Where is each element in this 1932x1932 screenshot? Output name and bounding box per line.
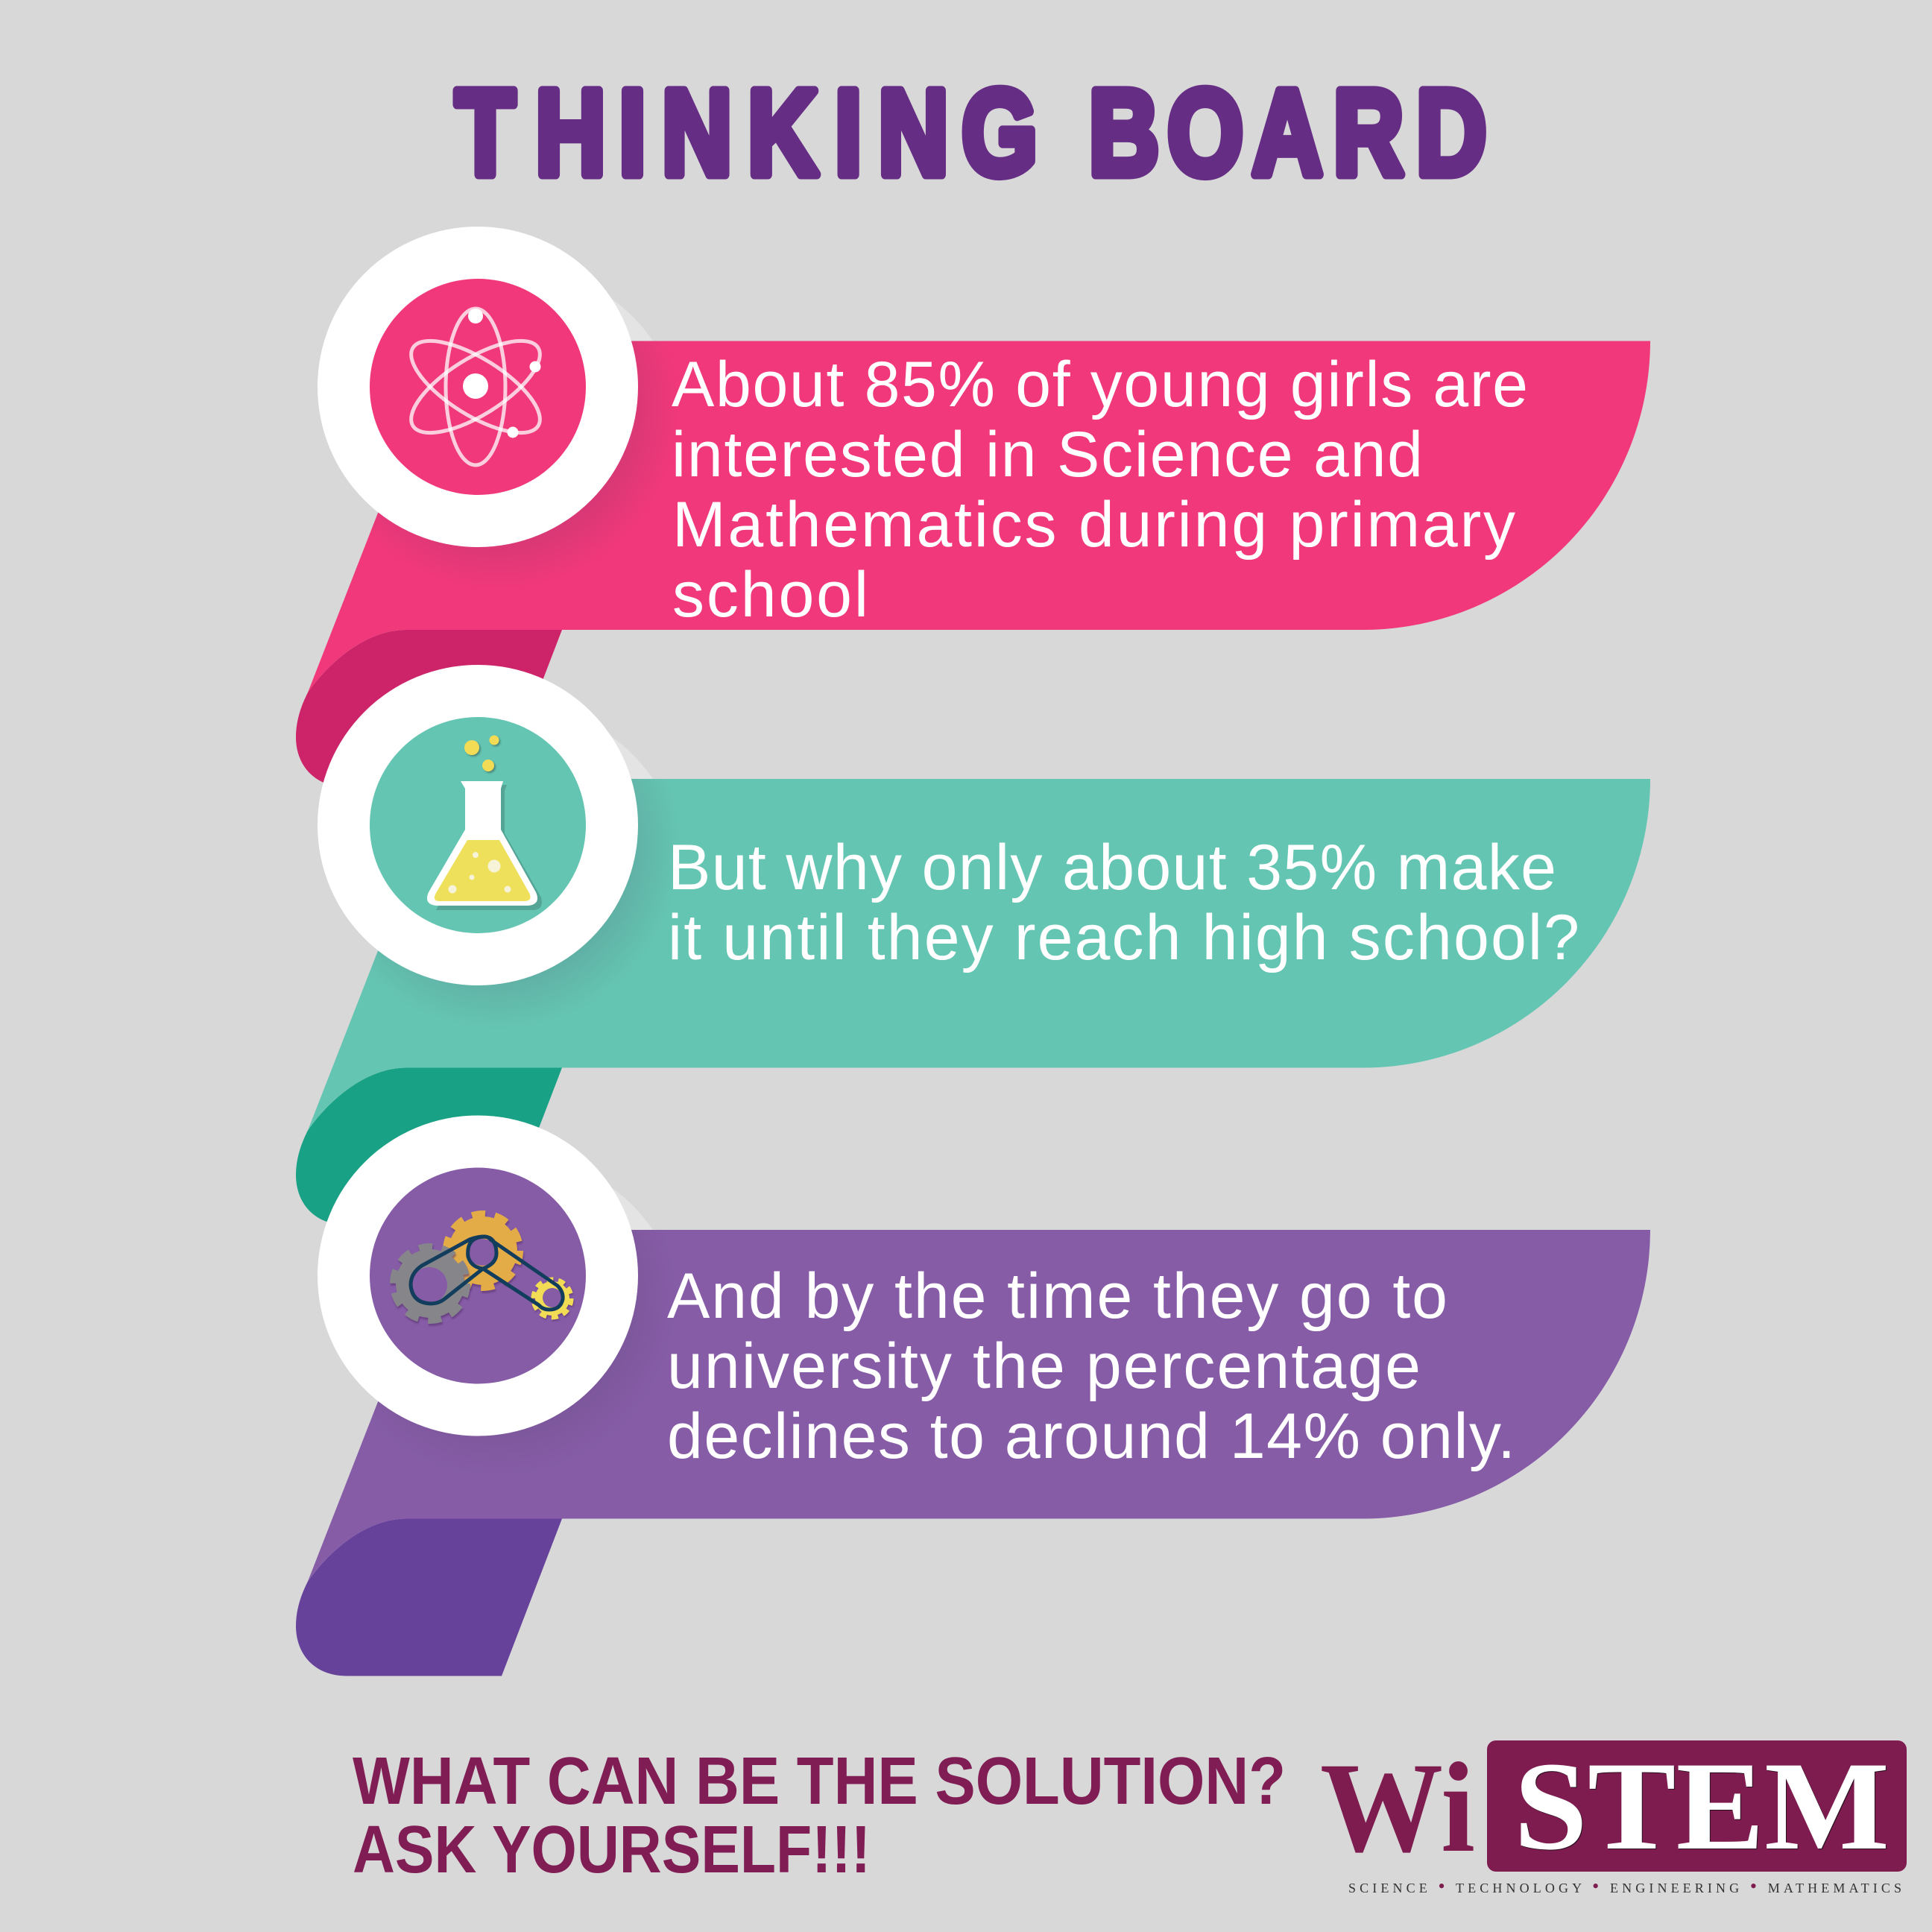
logo box [1487, 1740, 1907, 1872]
light shadow wedge [607, 733, 653, 779]
text block: teal ribbon: But why only about 35% make [668, 832, 1556, 903]
footer question [353, 1744, 1286, 1887]
ribbon fold [296, 1067, 562, 1225]
flask [427, 781, 537, 906]
icon: gears badge [318, 1115, 638, 1436]
drive belts [411, 1237, 563, 1310]
logo: WiSTEM [1320, 1736, 1907, 1897]
gear: yellow [534, 1280, 571, 1317]
ribbon face [308, 341, 1650, 692]
footer question: ASK YOURSELF!!! [353, 1813, 871, 1887]
icon: atom badge [318, 227, 638, 547]
panel: purple ribbon [296, 1115, 1650, 1676]
gear: orange [446, 1214, 520, 1287]
text block: pink ribbon: school [672, 559, 868, 631]
text block: purple ribbon: university the percentage [667, 1330, 1421, 1402]
circle shadow [377, 779, 660, 1009]
circle shadow [440, 1248, 644, 1445]
panel: teal ribbon [296, 663, 1650, 1225]
light shadow wedge [607, 1185, 653, 1230]
text block: purple ribbon: And by the time they go to [667, 1260, 1448, 1332]
ribbon face [308, 779, 1650, 1130]
liquid bubbles [449, 852, 511, 893]
text block: teal ribbon: it until they reach high school? [668, 902, 1579, 973]
footer question: WHAT CAN BE THE SOLUTION? [353, 1744, 1286, 1819]
icon: flask badge [318, 665, 638, 985]
circle shadow [376, 341, 663, 574]
ribbon face [308, 1230, 1650, 1582]
rising bubbles [464, 735, 499, 771]
atom nucleus and electrons [463, 309, 541, 438]
flask shadow [436, 785, 542, 910]
logo tagline: SCIENCE • TECHNOLOGY • ENGINEERING • MATHEMATICS [1348, 1875, 1901, 1897]
panel: pink ribbon [296, 226, 1650, 787]
text block: pink ribbon: About 85% of young girls are [672, 349, 1528, 420]
ribbon fold [296, 630, 562, 787]
text block: purple ribbon [667, 1260, 1515, 1472]
text block: pink ribbon: interested in Science and [672, 419, 1423, 490]
logo word: Wi: Wi [1320, 1737, 1475, 1879]
title: THINKING BOARD [455, 65, 1486, 201]
logo word: STEM: STEM [1514, 1736, 1890, 1876]
orange gear hole [468, 1239, 496, 1266]
text block: pink ribbon: Mathematics during primary [672, 489, 1515, 561]
ribbon fold [296, 1519, 562, 1676]
flask liquid [435, 840, 530, 901]
text block: pink ribbon [672, 349, 1528, 631]
gear: grey [394, 1247, 467, 1320]
text block: purple ribbon: declines to around 14% only. [667, 1401, 1515, 1472]
atom orbits [398, 309, 553, 465]
light shadow wedge [607, 296, 653, 341]
text block: teal ribbon [668, 832, 1579, 973]
